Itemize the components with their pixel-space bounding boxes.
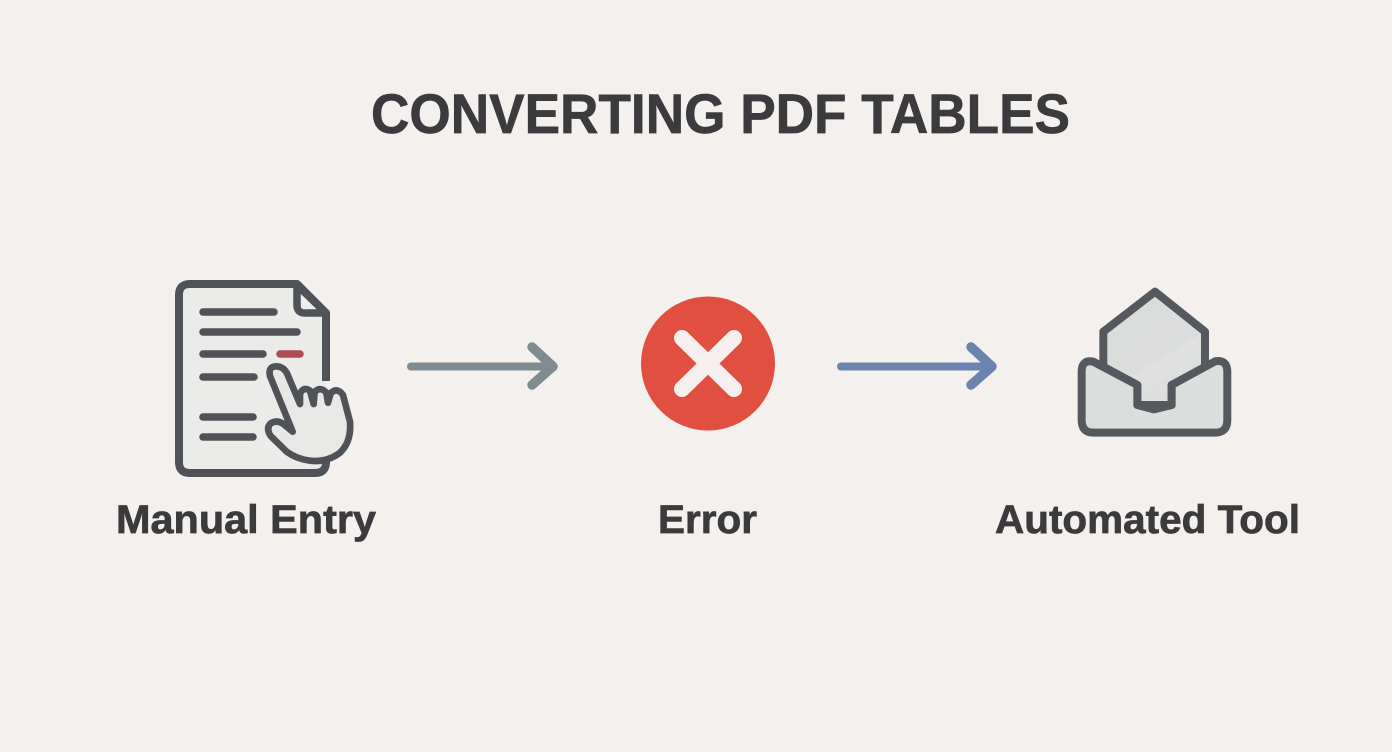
text lines [203,312,297,437]
document outline [179,284,326,473]
document page [179,284,326,473]
arrow: manual entry to error [411,347,553,385]
arrow: error to automated tool [841,347,992,385]
pointing hand [268,366,350,461]
title: CONVERTING PDF TABLES [371,82,1070,145]
envelope flap [1103,292,1205,405]
icon: open envelope (Automated Tool) [1082,292,1227,433]
folded corner [297,285,326,313]
icon: document with pointing hand (Manual Entry) [179,284,350,473]
envelope front [1082,361,1227,433]
label: Error: Error [658,498,757,542]
label: Automated Tool: Automated Tool [995,498,1300,542]
highlighted error mark [280,350,300,358]
label: Manual Entry: Manual Entry [116,498,377,542]
icon: error circle with cross [641,296,775,430]
